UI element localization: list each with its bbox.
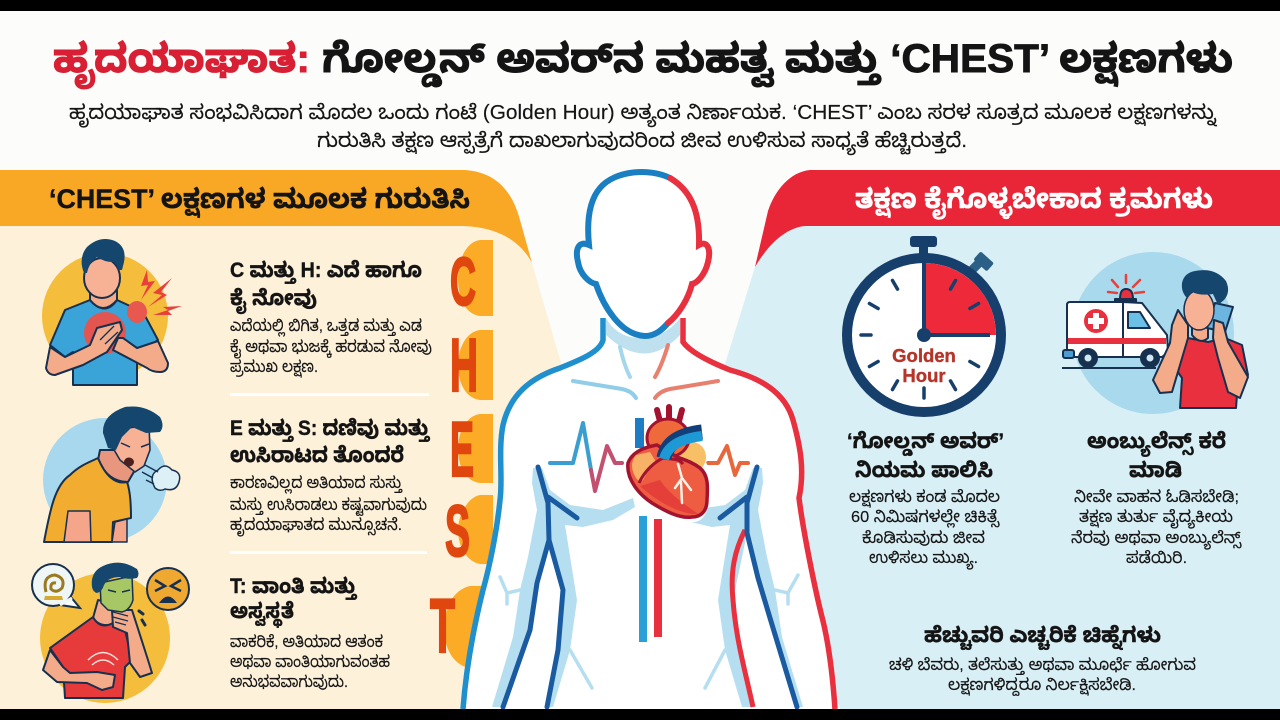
letter S: S xyxy=(445,492,470,572)
icon: heart xyxy=(628,407,712,522)
icon: golden hour stopwatch: Hour xyxy=(902,365,946,386)
letter T: T xyxy=(430,584,455,669)
step: call ambulance: ಪಡೆಯಿರಿ. xyxy=(1126,550,1187,567)
title: ಗೋಲ್ಡನ್ ಅವರ್‌ನ ಮಹತ್ವ ಮತ್ತು ‘CHEST’ ಲಕ್ಷಣಗಳು xyxy=(322,37,1233,88)
ambulance xyxy=(1062,289,1168,368)
symptom text xyxy=(230,259,432,378)
step: call ambulance: ತಕ್ಷಣ ತುರ್ತು ವೈದ್ಯಕೀಯ xyxy=(1079,509,1233,529)
heading: CHEST symptoms: ‘CHEST’ ಲಕ್ಷಣಗಳ ಮೂಲಕ ಗುರುತಿಸಿ xyxy=(49,184,470,218)
step: golden hour rule: ನಿಯಮ ಪಾಲಿಸಿ xyxy=(855,459,993,482)
step: call ambulance: ನೆರವು ಅಥವಾ ಅಂಬ್ಯುಲೆನ್ಸ್ xyxy=(1071,530,1242,550)
CHEST acronym letters xyxy=(430,240,493,669)
symptom text: ಅಸ್ವಸ್ಥತೆ xyxy=(230,600,294,628)
symptom text: ಪ್ರಮುಖ ಲಕ್ಷಣ. xyxy=(230,359,318,378)
step: golden hour rule: ಕೊಡಿಸುವುದು ಜೀವ xyxy=(862,530,985,547)
step: call ambulance: ಮಾಡಿ xyxy=(1129,459,1182,482)
symptom text: ಎದೆಯಲ್ಲಿ ಬಿಗಿತ, ಒತ್ತಡ ಮತ್ತು ಎಡ xyxy=(230,318,422,337)
intro text block: ಗುರುತಿಸಿ ತಕ್ಷಣ ಆಸ್ಪತ್ರೆಗೆ ದಾಖಲಾಗುವುದರಿಂದ ಜೀವ ಉಳಿಸುವ ಸಾಧ್ಯತೆ ಹೆಚ್ಚಿರುತ್ತದೆ. xyxy=(317,130,967,156)
intro text block: ಹೃದಯಾಘಾತ ಸಂಭವಿಸಿದಾಗ ಮೊದಲ ಒಂದು ಗಂಟೆ (Golden Hour) ಅತ್ಯಂತ ನಿರ್ಣಾಯಕ. ‘CHEST’ ಎಂಬ ಸರಳ ಸೂತ್ರದ ಮೂಲಕ ಲಕ್ಷಣಗಳನ್ನು xyxy=(69,102,1218,128)
additional warning signs: ಚಳಿ ಬೆವರು, ತಲೆಸುತ್ತು ಅಥವಾ ಮೂರ್ಛೆ ಹೋಗುವ xyxy=(889,657,1196,675)
letter C: C xyxy=(450,244,476,320)
step: call ambulance: ನೀವೇ ವಾಹನ ಓಡಿಸಬೇಡಿ; xyxy=(1074,488,1239,506)
torso outline xyxy=(463,318,835,709)
right arm vessels xyxy=(665,467,803,707)
icon: sick swirl bubble xyxy=(32,564,80,608)
panel: CHEST symptoms background xyxy=(0,170,566,709)
symptom text: T: ವಾಂತಿ ಮತ್ತು xyxy=(230,575,358,600)
symptom text: ಹೃದಯಾಘಾತದ ಮುನ್ಸೂಚನೆ. xyxy=(230,517,402,537)
letter H: H xyxy=(450,323,478,407)
step: call ambulance xyxy=(1071,430,1242,567)
central vessels xyxy=(639,516,662,642)
beacon rays xyxy=(1108,275,1144,293)
step: golden hour rule: ಲಕ್ಷಣಗಳು ಕಂಡ ಮೊದಲ xyxy=(849,489,1000,508)
icon: pain bolts xyxy=(141,270,182,315)
symptom text: ಕೈ ನೋವು xyxy=(230,287,317,314)
collar and neck lines xyxy=(573,345,718,398)
icon: nauseous man xyxy=(40,563,170,703)
icon: distressed emoji xyxy=(147,568,189,610)
symptom text: ಮಸ್ತು ಉಸಿರಾಡಲು ಕಷ್ಟವಾಗುವುದು xyxy=(230,497,427,516)
symptom 2: fatigue and breathlessness xyxy=(43,406,431,542)
ECG lines xyxy=(550,423,748,491)
heading: immediate steps: ತಕ್ಷಣ ಕೈಗೊಳ್ಳಬೇಕಾದ ಕ್ರಮಗಳು xyxy=(855,184,1213,219)
symptom text: ಉಸಿರಾಟದ ತೊಂದರೆ xyxy=(230,444,404,467)
icon: breath puff xyxy=(142,465,180,490)
symptom text: C ಮತ್ತು H: ಎದೆ ಹಾಗೂ xyxy=(230,259,422,284)
icon: man short of breath xyxy=(43,406,167,542)
symptom text: ಕೈ ಅಥವಾ ಭುಜಕ್ಕೆ ಹರಡುವ ನೋವು xyxy=(230,339,432,359)
step: golden hour rule: ‘ಗೋಲ್ಡನ್ ಅವರ್’ xyxy=(847,430,1004,456)
symptom text: ಅಥವಾ ವಾಂತಿಯಾಗುವಂತಹ xyxy=(230,654,390,671)
icon: golden hour stopwatch xyxy=(847,236,1001,412)
symptom text: ಅನುಭವವಾಗುವುದು. xyxy=(230,674,348,691)
step: golden hour rule: 60 ನಿಮಿಷಗಳಲ್ಲೇ ಚಿಕಿತ್ಸೆ xyxy=(851,509,1000,528)
intro text block xyxy=(69,102,1218,156)
icon: golden hour stopwatch: Golden xyxy=(892,345,956,366)
step: golden hour rule: ಉಳಿಸಲು ಮುಖ್ಯ. xyxy=(869,550,978,570)
head outline xyxy=(577,172,709,336)
title xyxy=(53,37,1233,89)
symptom text: ಕಾರಣವಿಲ್ಲದ ಅತಿಯಾದ ಸುಸ್ತು xyxy=(230,475,403,494)
additional warning signs xyxy=(889,624,1196,696)
symptom text xyxy=(230,575,390,691)
symptom 3: nausea xyxy=(32,563,390,703)
symptom text: E ಮತ್ತು S: ದಣಿವು ಮತ್ತು xyxy=(230,417,431,442)
central body illustration xyxy=(463,172,835,709)
symptom text: ವಾಕರಿಕೆ, ಅತಿಯಾದ ಆತಂಕ xyxy=(230,634,383,651)
letter E: E xyxy=(450,405,474,493)
panel: immediate steps background xyxy=(720,170,1280,709)
icon: ambulance and caller xyxy=(1062,252,1248,414)
symptom text xyxy=(230,417,431,537)
additional warning signs: ಹೆಚ್ಚುವರಿ ಎಚ್ಚರಿಕೆ ಚಿಹ್ನೆಗಳು xyxy=(924,624,1161,650)
step: golden hour rule xyxy=(847,430,1004,570)
additional warning signs: ಲಕ್ಷಣಗಳಿದ್ದರೂ ನಿರ್ಲಕ್ಷಿಸಬೇಡಿ. xyxy=(948,677,1136,696)
left arm vessels xyxy=(492,467,635,707)
caller xyxy=(1153,270,1248,408)
title: ಹೃದಯಾಘಾತ: xyxy=(53,37,310,89)
symptom 1: chest and arm pain xyxy=(42,239,432,385)
step: call ambulance: ಅಂಬ್ಯುಲೆನ್ಸ್ ಕರೆ xyxy=(1087,430,1226,457)
icon: man with chest pain xyxy=(42,239,168,385)
